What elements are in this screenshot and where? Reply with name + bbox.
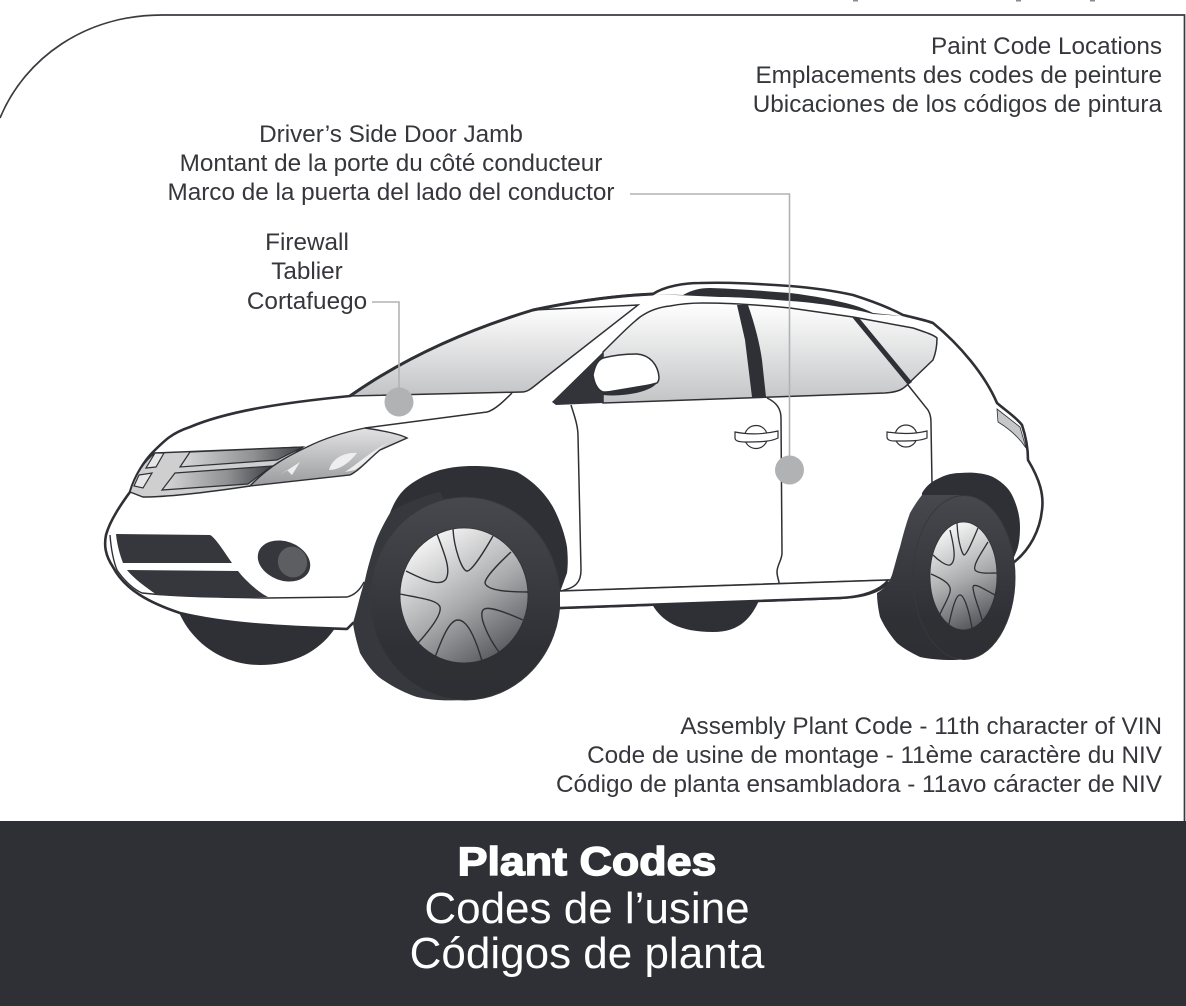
text: assembly plant code: Assembly Plant Code - 11th character of VIN (680, 713, 1162, 740)
callout: firewall leader line and dot (372, 302, 414, 416)
footer title: plant codes: Códigos de planta (410, 929, 765, 978)
grille bar lower (162, 466, 272, 490)
bumper inner line (110, 535, 364, 598)
side windows (603, 303, 937, 403)
text: firewall: Firewall (265, 229, 349, 256)
front wheel arch (390, 466, 568, 640)
text: driver's side door jamb: Marco de la puerta del lado del conductor (167, 179, 615, 206)
footer title: plant codes (410, 839, 765, 978)
upper bumper vent (116, 534, 232, 563)
tail light (997, 409, 1026, 448)
text: assembly plant code: Code de usine de montage - 11ème caractère du NIV (587, 742, 1163, 769)
rear wheel arch (920, 473, 1020, 620)
front tire side (353, 492, 500, 700)
callout: door jamb leader line and dot (630, 194, 804, 484)
text: paint code locations: Ubicaciones de los códigos de pintura (753, 91, 1162, 118)
text: paint code locations: Paint Code Locations (931, 33, 1162, 60)
windshield (350, 305, 638, 396)
grille bar upper (180, 447, 303, 467)
roof rail (653, 288, 903, 316)
door lines (365, 385, 932, 591)
footer banner (0, 821, 1186, 1006)
text: paint code locations (753, 33, 1162, 118)
roofline emphasis (350, 294, 653, 396)
grille surround (130, 447, 303, 497)
underbody middle (650, 596, 761, 632)
car illustration (105, 283, 1042, 700)
C pillar (852, 317, 912, 385)
door handle rear (887, 425, 927, 447)
footer title: plant codes: Plant Codes (458, 839, 716, 883)
text: driver's side door jamb: Montant de la porte du côté conducteur (180, 150, 602, 177)
headlight (250, 428, 407, 486)
text: assembly plant code (556, 713, 1163, 798)
rear hub (930, 522, 997, 630)
rear tire side (877, 495, 1000, 660)
text: driver's side door jamb (167, 121, 615, 206)
A pillar triangle (552, 352, 603, 405)
rear tire (913, 496, 1015, 660)
door handle front (735, 426, 778, 448)
sill (560, 580, 888, 608)
underbody front (178, 610, 337, 665)
grille small inserts (134, 453, 164, 488)
front hub (400, 528, 528, 663)
fog light (252, 533, 316, 589)
side mirror (593, 354, 659, 395)
cropped text remnants at top edge (853, 0, 1095, 2)
car body (105, 283, 1042, 629)
footer title: plant codes: Codes de l’usine (424, 884, 750, 933)
sill lower edge (560, 588, 880, 608)
text: firewall: Tablier (271, 258, 343, 285)
text: driver's side door jamb: Driver’s Side Door Jamb (259, 121, 523, 148)
B pillar (737, 305, 766, 397)
text: paint code locations: Emplacements des codes de peinture (755, 62, 1162, 89)
text: assembly plant code: Código de planta ensambladora - 11avo cáracter de NIV (556, 771, 1163, 798)
lower bumper vent (127, 570, 268, 597)
front tire (370, 497, 560, 700)
text: firewall: Cortafuego (247, 288, 367, 315)
text: firewall (247, 229, 367, 315)
